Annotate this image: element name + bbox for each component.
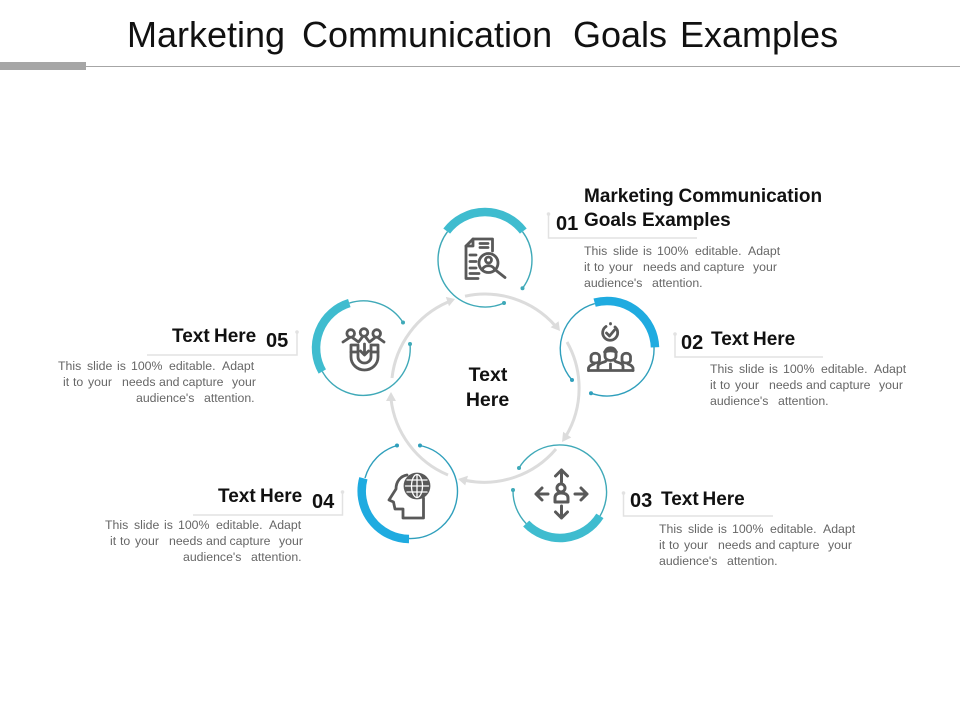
icon: document with magnifier [466, 239, 505, 278]
body 01: capture [704, 260, 745, 274]
ring 04 [362, 444, 457, 539]
heading 03: Text [661, 489, 699, 510]
body 04: audience's [183, 550, 241, 564]
body 03: editable. [770, 522, 816, 536]
step 01 [438, 186, 822, 307]
title: Communication [302, 14, 552, 55]
body 03: Adapt [823, 522, 856, 536]
body 04: This [105, 518, 128, 532]
body 01: needs [643, 260, 677, 274]
body 05: needs [122, 375, 156, 389]
body 03: capture [778, 538, 820, 552]
step 04 [105, 444, 457, 564]
body 02: Adapt [874, 362, 907, 376]
body 04: 100% [178, 518, 210, 532]
body 04: your [135, 534, 159, 548]
body 02: editable. [821, 362, 868, 376]
step 02 [560, 301, 907, 408]
central cycle arrows [386, 294, 579, 485]
body 02: and [806, 378, 827, 392]
body 03: needs [718, 538, 752, 552]
icon: team with checkmark [588, 324, 633, 370]
body 03: attention. [727, 554, 778, 568]
body 03: your [828, 538, 852, 552]
body 02: 100% [783, 362, 815, 376]
body 01: Adapt [748, 244, 781, 258]
body 01: your [609, 260, 633, 274]
body 05: to [73, 375, 83, 389]
leader 04 [193, 490, 344, 515]
body 05: 100% [131, 359, 163, 373]
title: Marketing [127, 14, 285, 55]
body 01: editable. [695, 244, 742, 258]
heading 04: Text [218, 486, 256, 507]
body 04 [105, 518, 303, 564]
icon: head with globe [389, 474, 429, 518]
heading 03: Here [702, 489, 745, 510]
body 03: to [669, 538, 679, 552]
body 01: to [594, 260, 604, 274]
body 05: your [88, 375, 112, 389]
body 02: audience's [710, 394, 768, 408]
number 03: 03 [630, 490, 652, 512]
body 05: Adapt [222, 359, 255, 373]
header rule [0, 62, 960, 70]
heading 01: Marketing [584, 186, 674, 207]
body 04: attention. [251, 550, 302, 564]
number 02: 02 [681, 332, 703, 354]
body 04: capture [230, 534, 271, 548]
ring 02 [560, 301, 655, 396]
body 03: audience's [659, 554, 717, 568]
body 05: and [159, 375, 180, 389]
body 01: is [643, 244, 652, 258]
body 05: capture [182, 375, 224, 389]
title: Examples [680, 14, 838, 55]
title: Goals [573, 14, 667, 55]
body 03: slide [688, 522, 713, 536]
heading 01: Communication [678, 186, 822, 207]
body 04: Adapt [269, 518, 302, 532]
body 04: editable. [216, 518, 262, 532]
center label [466, 364, 509, 411]
body 01: your [753, 260, 777, 274]
ring 01 [438, 212, 532, 307]
body 04: is [164, 518, 173, 532]
body 04: it [110, 534, 117, 548]
body 03: This [659, 522, 682, 536]
step 05 [58, 301, 412, 405]
body 02: slide [739, 362, 764, 376]
leader 02 [673, 332, 823, 357]
center label: Here [466, 389, 509, 411]
icon: people and magnet [343, 329, 384, 370]
body 02: your [879, 378, 903, 392]
body 01: 100% [657, 244, 689, 258]
number 01: 01 [556, 213, 578, 235]
body 05: This [58, 359, 81, 373]
body 02: attention. [778, 394, 829, 408]
body 05: slide [87, 359, 112, 373]
ring 05 [316, 301, 412, 395]
leader 03 [622, 491, 773, 516]
body 05: audience's [136, 391, 194, 405]
body 05: it [63, 375, 70, 389]
body 04: and [206, 534, 227, 548]
body 03: 100% [732, 522, 764, 536]
body 03 [659, 522, 856, 568]
ring 03 [511, 445, 607, 538]
heading 02: Here [753, 329, 795, 350]
heading 05: Text [172, 326, 210, 347]
heading 04: Here [260, 486, 302, 507]
body 05: your [232, 375, 256, 389]
number 04: 04 [312, 491, 335, 513]
heading 01: Goals [584, 210, 637, 231]
step 03 [511, 445, 856, 568]
center label: Text [469, 364, 508, 386]
body 04: your [279, 534, 303, 548]
body 05 [58, 359, 256, 405]
body 04: needs [169, 534, 203, 548]
body 02: is [769, 362, 778, 376]
body 02: needs [769, 378, 803, 392]
body 03: it [659, 538, 666, 552]
body 05: editable. [169, 359, 216, 373]
heading 01 [584, 186, 822, 231]
heading 02: Text [711, 329, 749, 350]
body 02: This [710, 362, 733, 376]
number 05: 05 [266, 330, 288, 352]
icon: person with four arrows [536, 470, 587, 518]
heading 01: Examples [642, 210, 731, 231]
body 03: and [755, 538, 776, 552]
body 03: your [684, 538, 708, 552]
body 01: audience's [584, 276, 642, 290]
body 02: to [720, 378, 730, 392]
leader 05 [147, 330, 299, 355]
body 01: and [680, 260, 701, 274]
body 01: This [584, 244, 607, 258]
body 01: it [584, 260, 591, 274]
body 04: slide [134, 518, 159, 532]
body 02 [710, 362, 907, 408]
body 03: is [718, 522, 727, 536]
body 02: capture [830, 378, 871, 392]
body 01: attention. [652, 276, 703, 290]
body 02: your [735, 378, 759, 392]
body 04: to [120, 534, 130, 548]
leader 01 [547, 212, 697, 238]
body 01 [584, 244, 781, 290]
body 05: attention. [204, 391, 255, 405]
body 05: is [117, 359, 126, 373]
heading 05: Here [214, 326, 256, 347]
body 02: it [710, 378, 717, 392]
body 01: slide [613, 244, 638, 258]
